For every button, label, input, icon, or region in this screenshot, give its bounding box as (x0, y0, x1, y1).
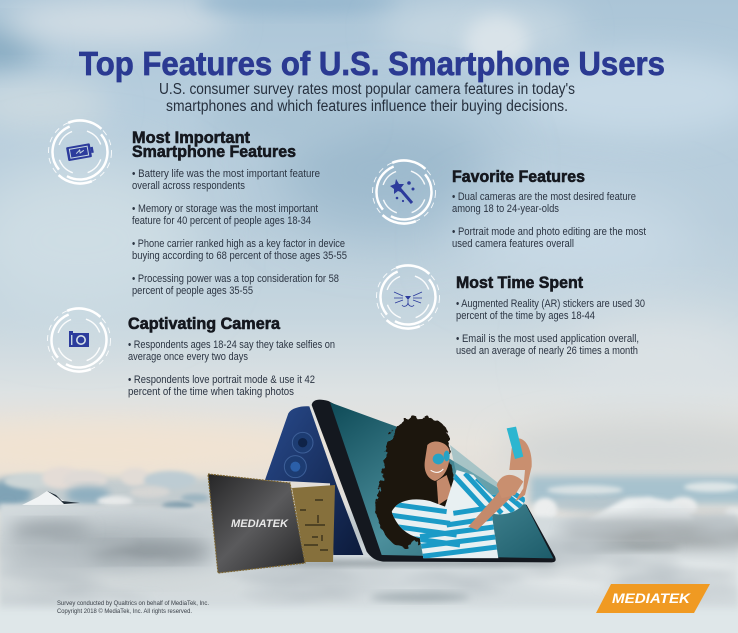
text: most important features bullets: • Processing power was a top consideration for 58 (132, 273, 339, 285)
text: most time spent bullets: used an average of nearly 26 times a month (456, 345, 638, 357)
text: most time spent bullets: • Email is the most used application overall, (456, 333, 639, 345)
text: most important features bullets: feature for 40 percent of people ages 18-34 (132, 215, 311, 227)
mountain: right peak (586, 497, 695, 520)
text: most time spent bullets (456, 298, 645, 357)
text: captivating camera bullets: percent of the time when taking photos (128, 386, 294, 398)
title: Top Features of U.S. Smartphone Users (79, 45, 665, 82)
woman (375, 417, 537, 558)
heading: most important smartphone features (132, 128, 296, 161)
text: captivating camera bullets (128, 339, 335, 398)
icon: camera (38, 299, 120, 381)
icon: battery (39, 111, 121, 193)
heading: most time spent: Most Time Spent (456, 273, 583, 292)
gold die (292, 485, 335, 562)
hair (375, 417, 458, 548)
heading: most important smartphone features: Smartphone Features (132, 142, 296, 161)
chip body (208, 474, 305, 573)
cloud layer (0, 504, 738, 633)
icon: magic wand (363, 151, 445, 233)
shirt (392, 470, 525, 558)
illustration: MediaTek chip (208, 474, 335, 573)
text: favorite features bullets: • Portrait mode and photo editing are the most (452, 226, 646, 238)
subtitle: smartphones and which features influence their buying decisions. (166, 98, 568, 115)
text: captivating camera bullets: • Respondents love portrait mode & use it 42 (128, 374, 315, 386)
clouds: left horizon (0, 467, 215, 510)
text: captivating camera bullets: average once every two days (128, 351, 248, 363)
phone back with dual camera (265, 406, 363, 555)
text: most important features bullets (132, 168, 347, 297)
footnote: Copyright 2018 © MediaTek, Inc. All rights reserved. (57, 608, 192, 615)
cloud texture (0, 510, 738, 605)
footnote (57, 600, 209, 615)
heading: most important smartphone features: Most Important (132, 128, 250, 147)
text: most important features bullets: overall across respondents (132, 180, 245, 192)
clouds: right horizon (530, 476, 738, 522)
subtitle (159, 81, 575, 115)
footnote: Survey conducted by Qualtrics on behalf of MediaTek, Inc. (57, 600, 209, 607)
phone screen (330, 402, 553, 558)
text: most important features bullets: • Memory or storage was the most important (132, 203, 318, 215)
text: favorite features bullets (452, 191, 646, 250)
subtitle: U.S. consumer survey rates most popular camera features in today's (159, 81, 575, 98)
text: most important features bullets: buying according to 68 percent of those ages 35-55 (132, 250, 347, 262)
handheld phone (507, 427, 523, 459)
chip logo: MEDIATEK (231, 518, 289, 530)
logo: MediaTek: MEDIATEK (612, 591, 691, 606)
text: most time spent bullets: • Augmented Reality (AR) stickers are used 30 (456, 298, 645, 310)
logo: MediaTek (596, 584, 710, 613)
mountain: left peak (22, 491, 80, 505)
text: most time spent bullets: percent of the time by ages 18-44 (456, 310, 595, 322)
text: favorite features bullets: • Dual cameras are the most desired feature (452, 191, 636, 203)
text: most important features bullets: percent of people ages 35-55 (132, 285, 253, 297)
text: favorite features bullets: used camera features overall (452, 238, 574, 250)
icon: cat whiskers (367, 256, 449, 338)
illustration: phone and selfie (250, 400, 557, 567)
phone front frame (312, 400, 556, 562)
heading: favorite features: Favorite Features (452, 167, 585, 186)
text: most important features bullets: • Phone carrier ranked high as a key factor in device (132, 238, 345, 250)
text: captivating camera bullets: • Respondents ages 18-24 say they take selfies on (128, 339, 335, 351)
arms and hands (468, 490, 512, 530)
text: most important features bullets: • Battery life was the most important feature (132, 168, 320, 180)
heading: captivating camera: Captivating Camera (128, 314, 281, 333)
face and sunglasses (425, 441, 450, 481)
text: favorite features bullets: among 18 to 24-year-olds (452, 203, 559, 215)
